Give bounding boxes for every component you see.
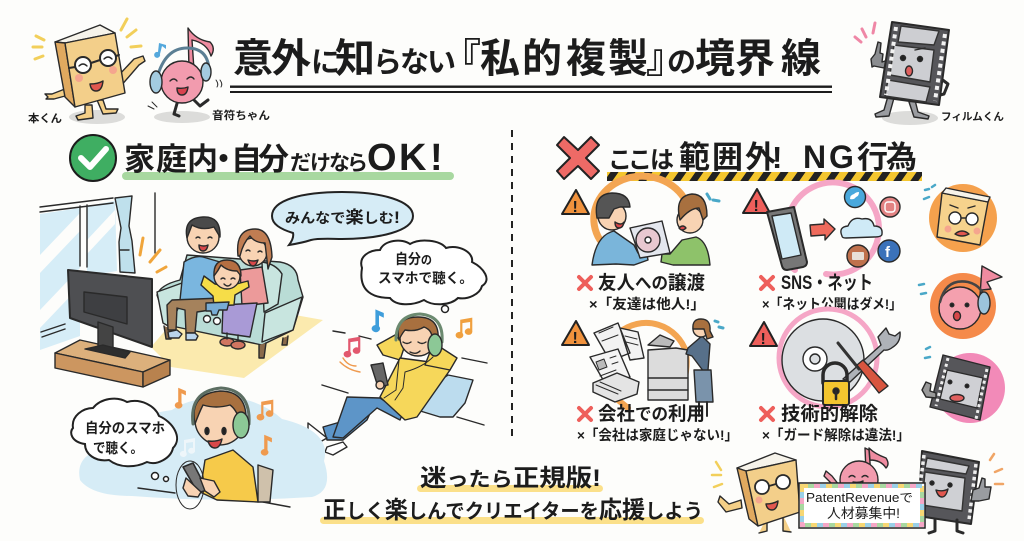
icon: warning orange: ! [572, 199, 578, 216]
heading: allowed: OK! [367, 137, 443, 179]
text: company heading [577, 403, 738, 443]
thought bubble: own phone (bottom): で聴く。 [93, 440, 143, 456]
music notes: relaxing person [344, 309, 472, 357]
scene: person listening with phone [79, 388, 327, 509]
closing message: 迷ったら 正規版! [420, 465, 601, 492]
title: 意外 [233, 37, 311, 81]
icon: warning red [743, 189, 770, 215]
text: transfer heading [579, 272, 705, 312]
character: book mascot [33, 19, 145, 124]
illustration: disc, lock and tools [779, 309, 900, 407]
heading: allowed: 家庭内・自分 [124, 142, 289, 177]
heading: prohibited: ここは [608, 147, 674, 174]
title: の [667, 47, 696, 79]
text: circumvention heading [761, 402, 910, 443]
label: film: フィルムくん [941, 111, 1004, 123]
film mascot [917, 451, 1003, 533]
heading: prohibited: 行為 [857, 140, 917, 175]
title: 知 [335, 37, 375, 81]
text: circumvention heading: 技術的解除 [781, 402, 878, 425]
icon: warning red: ! [760, 331, 766, 348]
illustration: copier and newspapers [590, 319, 723, 416]
thought bubble: own phone (top) [361, 241, 487, 312]
icon: warning orange [562, 321, 589, 347]
text: sns heading [761, 272, 902, 312]
icon: warning red [750, 322, 777, 348]
text: transfer heading: ×「友達は他人!」 [589, 296, 705, 312]
music notes: listening person [175, 388, 273, 457]
text: sns heading: ×「ネット公開はダメ!」 [762, 296, 902, 312]
text: company heading: ×「会社は家庭じゃない!」 [577, 427, 738, 443]
heading: prohibited: NG [803, 139, 854, 175]
text: company heading: 会社での利用 [598, 403, 705, 425]
icon: warning orange: ! [572, 330, 578, 347]
icon: warning orange [562, 190, 589, 216]
thought bubble: own phone (bottom): 自分のスマホ [85, 420, 165, 436]
heading: allowed [70, 135, 454, 181]
speech bubble: enjoy together [272, 192, 413, 245]
icon: warning red: ! [754, 198, 759, 215]
character: worried note [919, 266, 1002, 339]
title: 境界線 [695, 37, 821, 81]
title: 『私的複製』 [441, 37, 686, 81]
panel: technical circumvention [750, 309, 910, 443]
scene: family watching tv [40, 193, 323, 387]
character: film mascot [855, 22, 949, 125]
thought bubble: own phone (bottom) [71, 399, 177, 482]
note mascot [824, 448, 892, 499]
illustration: two people handing disc [592, 176, 719, 265]
character: music note mascot [148, 28, 222, 123]
speech bubble: enjoy together: みんなで 楽しむ! [285, 208, 400, 227]
text: sns heading: SNS・ネット [781, 272, 873, 294]
sign: recruiting: 人材募集中! [827, 506, 900, 521]
heading: prohibited [557, 137, 922, 181]
heading: allowed: だけなら [290, 152, 368, 175]
sign: recruiting [799, 483, 925, 528]
heading: prohibited: 範囲外! [679, 140, 782, 175]
panel: use at company [562, 319, 738, 443]
character: worried film [922, 347, 1005, 423]
panel: sns and net [743, 183, 902, 312]
label: book: 本くん [28, 111, 62, 125]
illustration: phone to cloud and social icons: f [885, 244, 891, 261]
sign: recruiting: PatentRevenueで [806, 491, 913, 505]
closing message [320, 465, 704, 524]
label: note: 音符ちゃん [212, 108, 270, 122]
mascots with recruiting sign [712, 448, 1003, 533]
title: らない [373, 47, 456, 79]
scene: person relaxing with headphones [308, 314, 487, 455]
illustration: phone to cloud and social icons [767, 183, 900, 275]
divider [511, 130, 513, 442]
panel: transfer to a friend [562, 176, 719, 312]
text: transfer heading: 友人への譲渡 [598, 272, 705, 294]
closing message: 正しく楽しんでクリエイターを応援しよう [323, 497, 703, 524]
book mascot waving [712, 453, 800, 533]
title: に [311, 47, 340, 79]
thought bubble: own phone (top): 自分の [395, 251, 432, 267]
thought bubble: own phone (top): スマホで聴く。 [378, 270, 473, 286]
text: circumvention heading: ×「ガード解除は違法!」 [762, 427, 910, 443]
title [230, 37, 832, 93]
character: worried book [924, 184, 997, 252]
